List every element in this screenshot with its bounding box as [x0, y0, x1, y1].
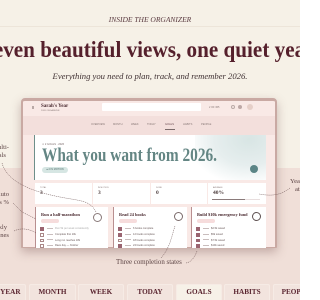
eyebrow rule: [0, 26, 300, 27]
stat card: done: 0: [156, 190, 159, 196]
sidebar toggle icon: [32, 106, 34, 109]
hero pill: ● 2 IN MOTION: [46, 168, 64, 171]
tab: the year: [0, 284, 26, 300]
tab: week: [78, 284, 124, 300]
stat card: total: [35, 183, 92, 204]
avatar: [247, 104, 253, 110]
tab: today: TODAY: [137, 288, 163, 296]
annotation: multi-goals: [0, 144, 9, 159]
eyebrow: inside the organizer: INSIDE THE ORGANIZER: [109, 14, 191, 24]
stat card: average: [208, 183, 266, 204]
header bell icon: [238, 105, 242, 109]
milestone 2: $5k saved: [211, 233, 223, 236]
annotation: auto percent: [0, 191, 9, 206]
annotation: weekly milestones: [0, 224, 9, 239]
header icons: [231, 105, 235, 109]
stat card: done: DONE: [156, 187, 162, 189]
tab: habits: [224, 284, 270, 300]
subtitle: Everything you need to plan, track, and remember 2026.: [53, 71, 247, 81]
tab: month: MONTH: [39, 288, 66, 296]
nav label 3: WEEK: [131, 123, 139, 126]
nav active: goals: [165, 123, 175, 130]
milestone 1: 6 books complete: [133, 227, 153, 230]
milestone 3: $7.5k saved: [211, 238, 225, 242]
tab: goals, active: [176, 284, 222, 300]
ring: [174, 212, 182, 221]
milestone 2: Complete first 10k: [55, 233, 76, 236]
tab: month: [29, 284, 76, 300]
stat card: in motion: 3: [98, 190, 101, 196]
hero gradient: [195, 135, 267, 180]
status pill: [197, 219, 215, 223]
tab: people: [273, 284, 319, 300]
milestone 4: Race day — finisher: [55, 244, 78, 247]
pink lower background band: [0, 168, 300, 300]
app window: [21, 98, 277, 248]
hero title: What you want from 2026.: [42, 146, 217, 166]
goal card: read books: [113, 207, 187, 248]
hero card: [34, 135, 266, 180]
hero pill: [42, 167, 68, 172]
annotation: year at a glance: [290, 178, 300, 193]
nav label habits: HABITS: [183, 123, 192, 126]
header status text: 2 OF 365: [209, 106, 219, 108]
stat card: total: 3: [40, 190, 43, 196]
title: Run a half-marathon: [41, 212, 80, 216]
milestone 2: 12 books complete: [133, 233, 155, 236]
brand name: Sarah's Year: [41, 104, 68, 109]
stat card: done: [151, 183, 207, 204]
stat card: in motion: [93, 183, 150, 204]
goal card: half marathon: [35, 207, 108, 248]
ring: [252, 212, 260, 221]
status pill: [119, 219, 137, 223]
tab: habits: HABITS: [233, 288, 261, 296]
tab: goals, active: GOALS: [186, 288, 212, 296]
milestone 3: Long run reaches 18k: [55, 238, 80, 242]
nav label 2: MONTH: [113, 123, 123, 126]
progress bar: [212, 199, 260, 200]
brand tagline: 2026 ORGANIZER: [41, 110, 59, 112]
milestone 4: 24 books complete: [133, 244, 155, 247]
nav band: [23, 116, 275, 135]
stat card: total: TOTAL: [40, 187, 46, 189]
status pill: [41, 219, 59, 223]
milestone 3: 18 books complete: [133, 238, 155, 242]
nav label people: PEOPLE: [201, 123, 211, 126]
goal card: emergency fund: [191, 207, 266, 248]
search box: [102, 103, 201, 111]
milestone 4: $10k saved: [211, 244, 224, 247]
title: Build $10k emergency fund: [197, 212, 248, 216]
nav active: goals: GOALS: [165, 123, 174, 126]
stat card: in motion: IN MOTION: [98, 187, 109, 189]
ring: [93, 212, 102, 222]
tab: today: [127, 284, 173, 300]
milestone 1: $2.5k saved: [211, 227, 225, 230]
title: Read 24 books: [119, 212, 146, 216]
hero eyebrow: ✦ 2 GOALS · 2026: [42, 143, 64, 146]
nav label 4: TODAY: [147, 123, 156, 126]
stat card: average: AVERAGE: [213, 187, 223, 189]
stat card: average: 40%: [213, 190, 224, 196]
hero teal button: [250, 165, 258, 173]
tab: week: WEEK: [90, 288, 112, 296]
annotation: three completion states: Three completion states: [116, 259, 182, 266]
milestone 1: Run 5k per week consistently: [55, 227, 89, 230]
nav labels: OVERVIEW: [91, 123, 105, 126]
